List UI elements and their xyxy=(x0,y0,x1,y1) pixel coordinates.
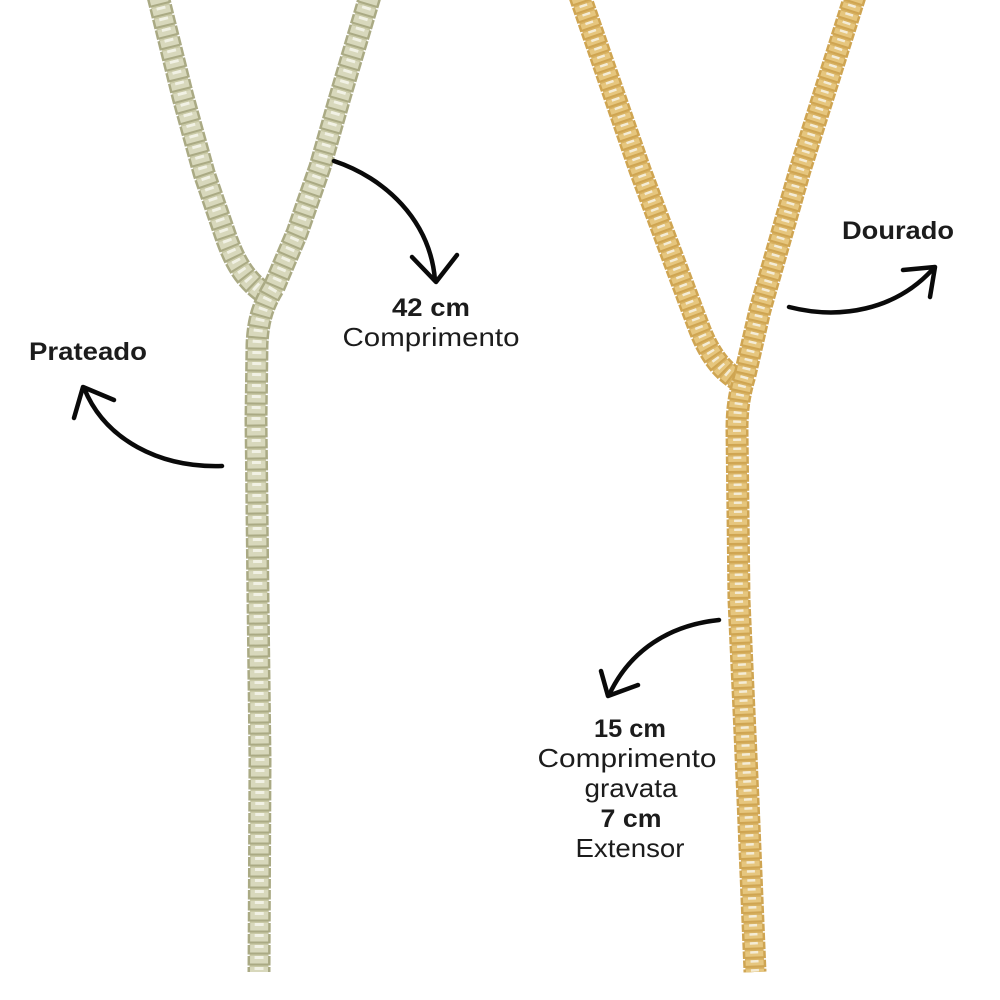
label: tie length and extender: 15 cm xyxy=(594,715,666,743)
arrow: length to 42 cm xyxy=(334,161,457,282)
label: tie length and extender: 7 cm xyxy=(600,805,662,833)
label: tie length and extender: gravata xyxy=(584,773,678,803)
label: tie length and extender xyxy=(538,715,716,863)
arrow: to Dourado xyxy=(789,267,935,312)
silver necklace xyxy=(158,0,370,972)
label: necklace length: 42 cm xyxy=(392,294,470,322)
label: Prateado: Prateado xyxy=(29,338,147,366)
label: necklace length: Comprimento xyxy=(342,322,520,352)
label: tie length and extender: Comprimento xyxy=(538,743,716,773)
arrow: to 15 cm xyxy=(601,620,719,696)
label: Dourado: Dourado xyxy=(842,217,954,245)
label: necklace length xyxy=(342,294,520,352)
label: tie length and extender: Extensor xyxy=(576,833,685,863)
arrow: to Prateado xyxy=(74,387,222,466)
gold necklace xyxy=(580,0,855,972)
